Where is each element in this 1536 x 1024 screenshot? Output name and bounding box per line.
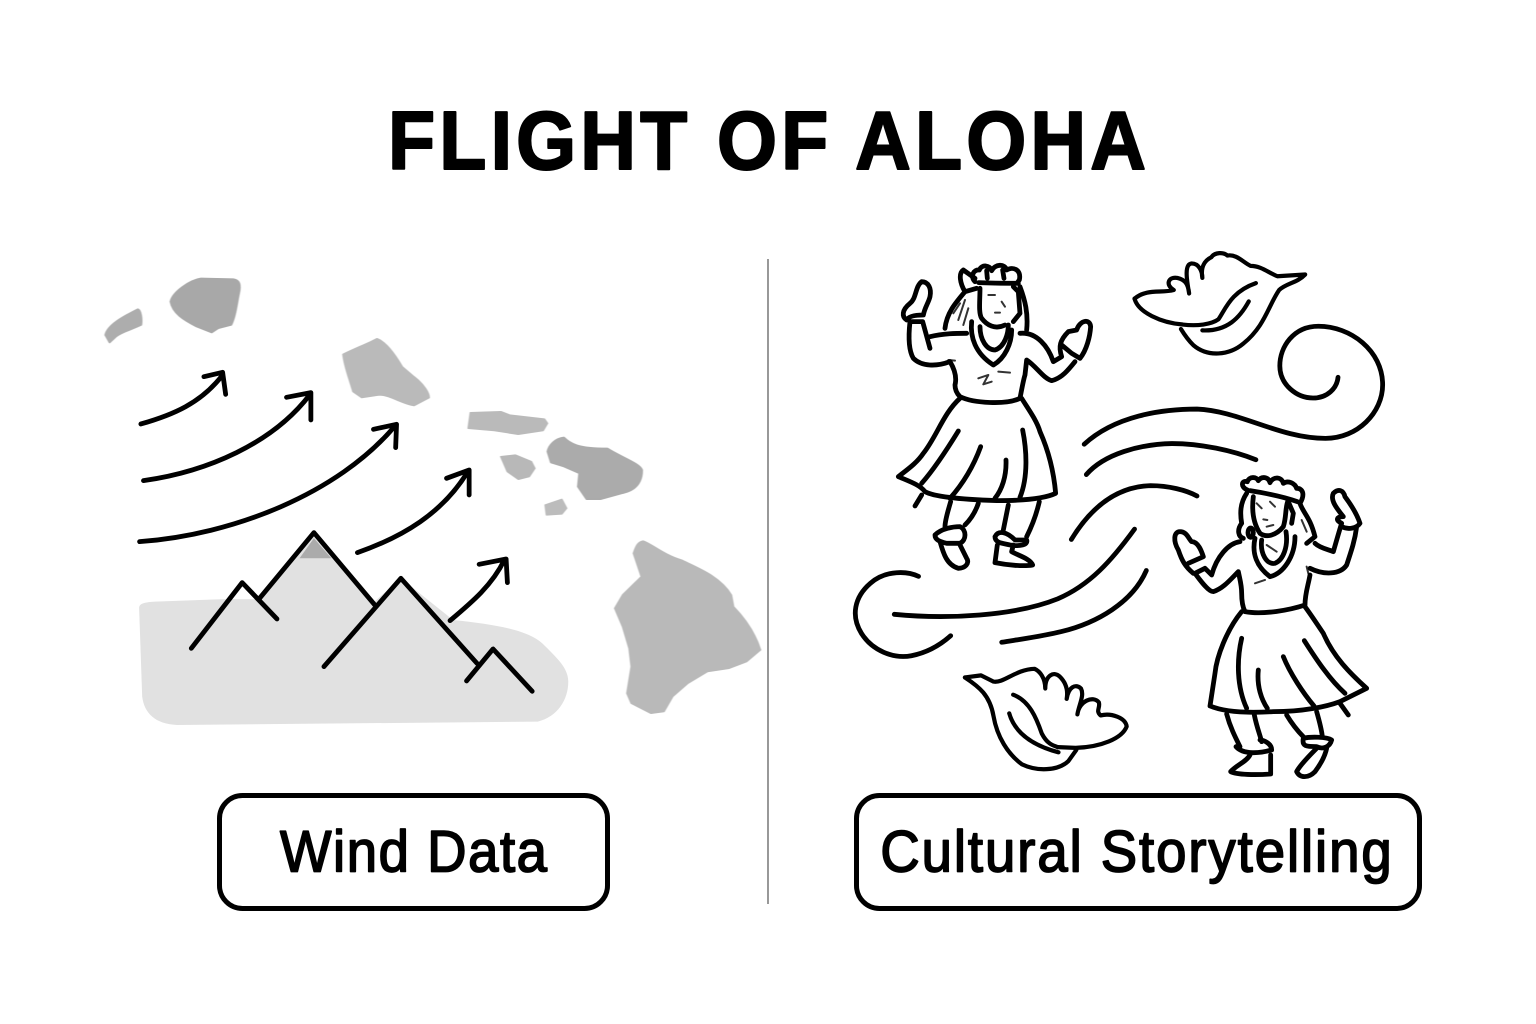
icon: top conch shell <box>1135 253 1305 353</box>
icon: mountains <box>191 533 532 691</box>
map: Hawaiian islands <box>105 278 760 713</box>
figure: hula dancer right <box>1175 478 1367 777</box>
mountain snow cap <box>300 538 331 558</box>
label box: Cultural Storytelling <box>856 796 1420 908</box>
label box: Cultural Storytelling: Cultural Storytelling <box>880 819 1392 884</box>
label box: Wind Data <box>220 796 608 908</box>
icon: bottom conch shell <box>965 669 1127 769</box>
label box: Wind Data: Wind Data <box>280 819 548 884</box>
figure: hula dancer left <box>898 265 1091 568</box>
arrows: wind flow <box>140 372 507 621</box>
title: FLIGHT OF ALOHA <box>388 93 1146 187</box>
wind swirls <box>855 326 1383 656</box>
divider between panels <box>767 259 769 904</box>
panel: wind data illustration <box>105 278 760 725</box>
terrain: light grey land mass <box>139 537 568 725</box>
